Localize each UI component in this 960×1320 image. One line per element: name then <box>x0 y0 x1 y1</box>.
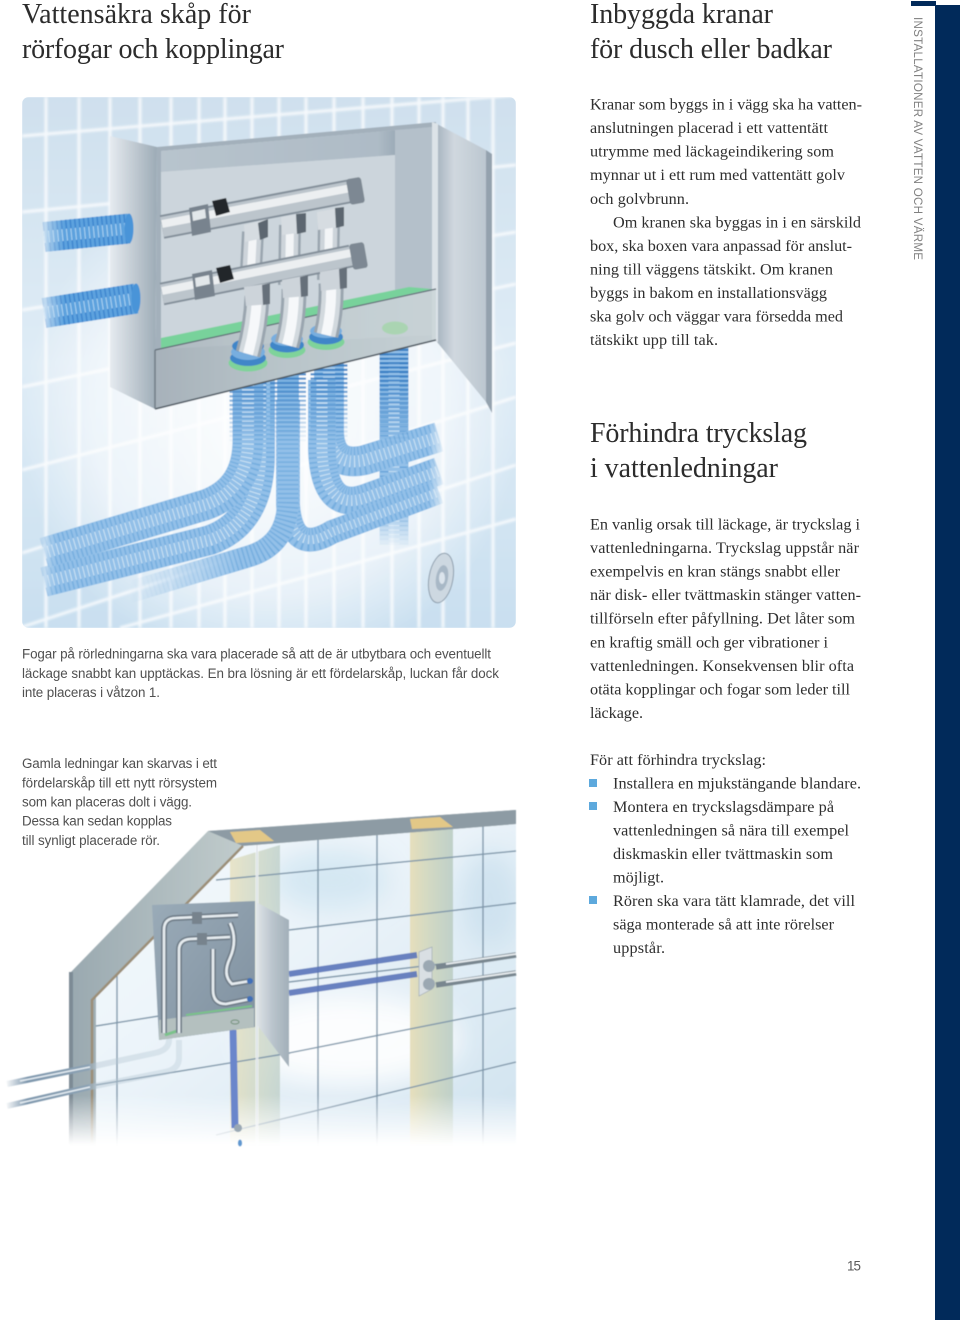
text block: kranar: Om kranen ska byggas in i en särskild <box>613 214 861 232</box>
top manifold with valve <box>162 177 365 242</box>
text block: kranar: ning till väggens tätskikt. Om kranen <box>590 260 833 278</box>
text block: tryckslag: läckage. <box>590 704 643 722</box>
translucent lip <box>155 289 436 409</box>
bullet 2: möjligt. <box>613 868 664 886</box>
pipe collars <box>228 324 344 372</box>
wall outlet fitting <box>427 552 454 604</box>
text block: kranar: och golvbrunn. <box>590 190 689 208</box>
text block: kranar: anslutningen placerad i ett vattentätt <box>590 119 828 137</box>
text block: kranar: tätskikt upp till tak. <box>590 331 718 349</box>
text block: kranar: mynnar ut i ett rum med vattentätt golv <box>590 166 846 184</box>
heading: tryckslag: Förhindra tryckslag <box>590 418 807 449</box>
heading: skåp <box>22 0 285 65</box>
illustration: distribution cabinet with pipes <box>22 95 516 628</box>
cabinet body <box>110 122 436 409</box>
text block: kranar: byggs in bakom en installationsvägg <box>590 284 827 302</box>
darker pipe tops under cabinet <box>248 340 394 445</box>
heading: skåp: rörfogar och kopplingar <box>22 34 285 65</box>
caption: gamla ledningar: Dessa kan sedan kopplas <box>22 814 172 828</box>
caption: fördelarskåp: Fogar på rörledningarna ska vara placerade så att de är utbytbara och eventuellt <box>22 646 491 662</box>
bullet 2: diskmaskin eller tvättmaskin som <box>613 845 833 863</box>
upper corrugated pipes <box>44 214 140 314</box>
heading: kranar <box>590 0 833 65</box>
bullet 2: Montera en tryckslagsdämpare på <box>613 798 834 816</box>
caption: gamla ledningar <box>22 756 217 848</box>
wall section band <box>71 810 516 1150</box>
bullet 2: vattenledningen så nära till exempel <box>613 822 850 840</box>
text block: tryckslag: vattenledningen. Konsekvensen blir ofta <box>590 657 854 675</box>
caption: fördelarskåp <box>22 646 499 700</box>
text block: kranar: utrymme med läckageindikering som <box>590 142 834 160</box>
caption: fördelarskåp: inte placeras i våtzon 1. <box>22 685 160 700</box>
bullet 3: Rören ska vara tätt klamrade, det vill <box>613 892 856 910</box>
caption: fördelarskåp: läckage snabbt kan upptäckas. En bra lösning är ett fördelarskåp, luckan får dock <box>22 666 499 681</box>
left supply pipes <box>7 1020 179 1106</box>
text block: tryckslag: otäta kopplingar och fogar som leder till <box>590 680 850 698</box>
vertical section label: INSTALLATIONER AV VATTEN OCH VÄRME <box>911 17 924 260</box>
text block: kranar <box>590 96 862 349</box>
heading: kranar: för dusch eller badkar <box>590 34 833 65</box>
text block: kranar: Kranar som byggs in i vägg ska ha vatten- <box>590 96 862 114</box>
heading: tryckslag <box>590 418 807 484</box>
text block: tryckslag <box>590 516 861 722</box>
page number: 15 <box>847 1258 861 1274</box>
text block: tryckslag: tillförseln efter påfyllning. Det låter som <box>590 610 855 628</box>
caption: gamla ledningar: Gamla ledningar kan skarvas i ett <box>22 756 217 771</box>
illustration: cabinet in wall cutaway <box>7 810 520 1150</box>
text block: kranar: box, ska boxen vara anpassad för anslut- <box>590 237 852 255</box>
small cabinet <box>152 901 289 1067</box>
heading: tryckslag: i vattenledningar <box>590 453 779 484</box>
text block: tryckslag: exempelvis en kran stängs snabbt eller <box>590 562 841 580</box>
caption: gamla ledningar: fördelarskåp till ett nytt rörsystem <box>22 776 217 790</box>
text block: tryckslag: när disk- eller tvättmaskin stänger vatten- <box>590 586 861 604</box>
wall plate and chrome pipes <box>419 947 516 996</box>
branch tubes <box>248 220 331 354</box>
bullet 3: uppstår. <box>613 939 665 957</box>
bullet 1: Installera en mjukstängande blandare. <box>613 774 861 792</box>
drain pipe and droplet <box>233 1030 242 1146</box>
bullet 2 <box>589 798 850 886</box>
blue through-wall pipes <box>289 955 417 993</box>
lower manifold with valve <box>162 242 368 306</box>
sidebar <box>911 1 960 1320</box>
text block: tryckslag: en kraftig smäll och ger vibrationer i <box>590 634 828 652</box>
door <box>432 122 492 413</box>
caption: gamla ledningar: till synligt placerade rör. <box>22 833 160 848</box>
text block: förhindra lista <box>589 751 861 957</box>
bullet 3: säga monterade så att inte rörelser <box>613 916 835 934</box>
bullet 3 <box>589 892 856 957</box>
text block: kranar: ska golv och väggar vara försedda med <box>590 308 843 326</box>
text block: tryckslag: vattenledningarna. Tryckslag uppstår när <box>590 539 860 557</box>
caption: gamla ledningar: som kan placeras dolt i vägg. <box>22 794 192 810</box>
text block: förhindra lista: För att förhindra tryckslag: <box>590 751 766 769</box>
text block: tryckslag: En vanlig orsak till läckage, är tryckslag i <box>590 516 860 534</box>
wall with tiles <box>96 824 520 1150</box>
lower corrugated pipes <box>44 345 439 598</box>
